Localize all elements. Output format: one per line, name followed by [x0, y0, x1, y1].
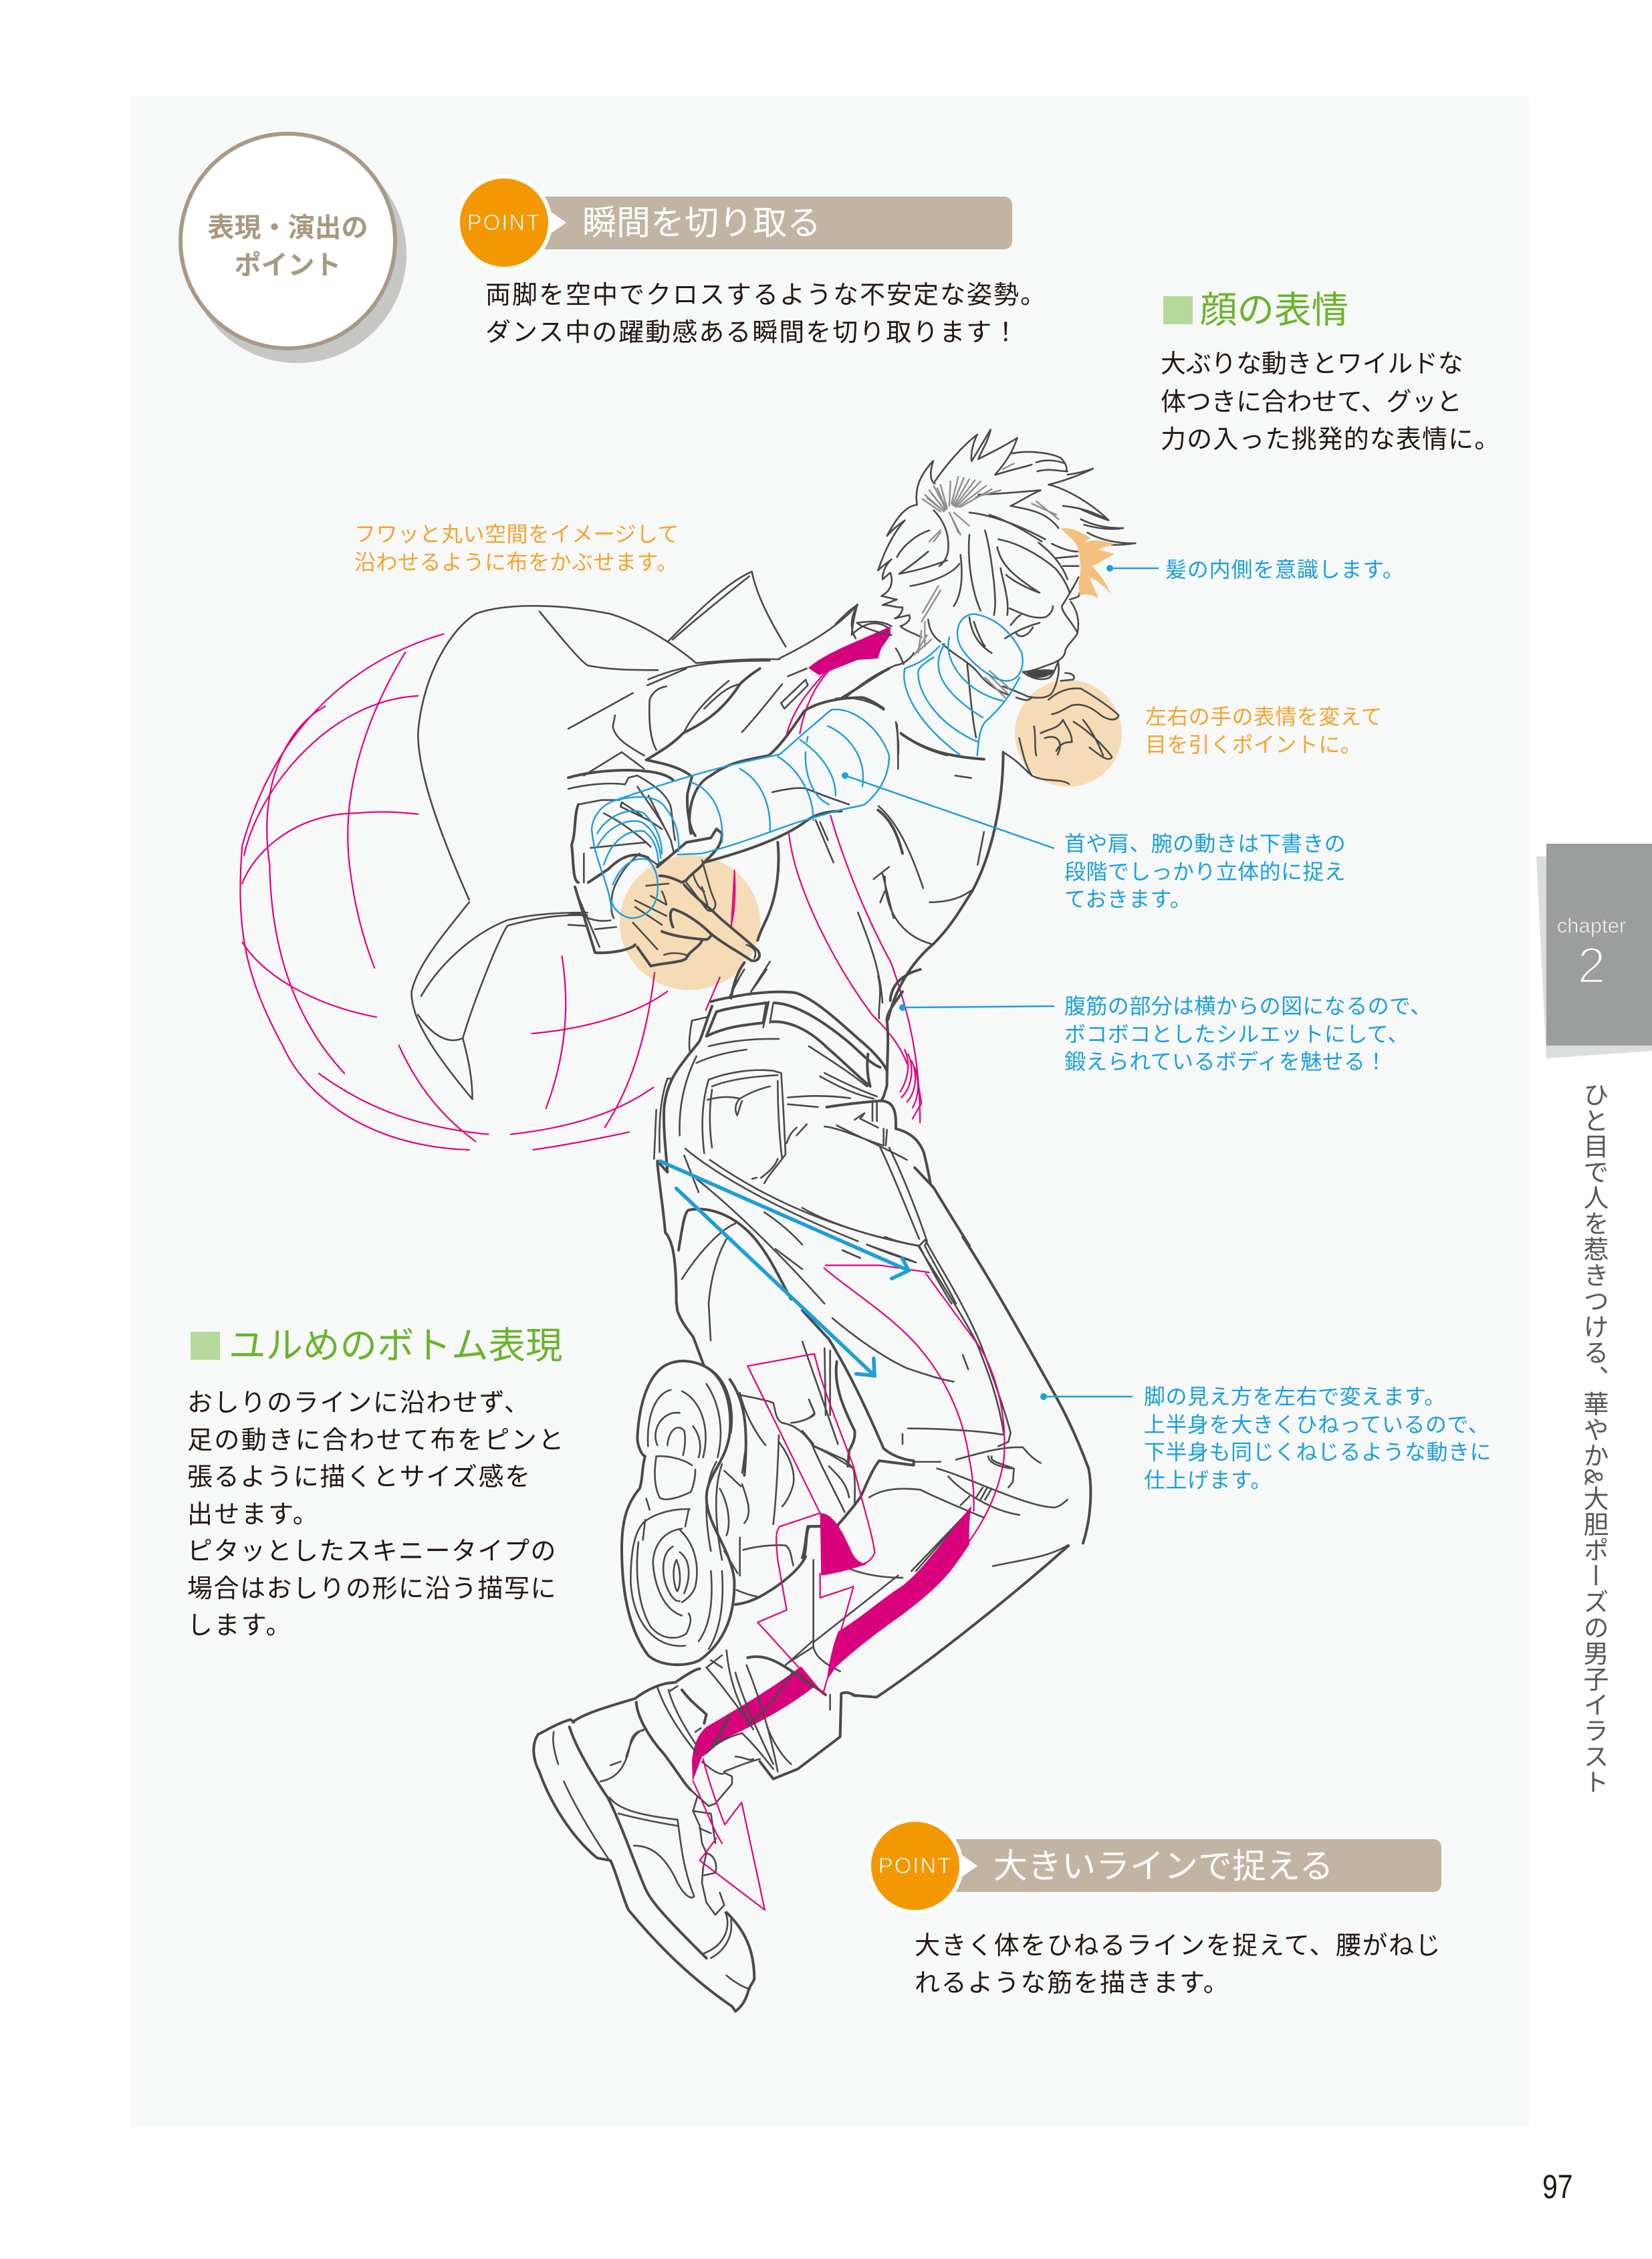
blue construction lines: neck and head [904, 614, 1023, 755]
page number: 97 [1542, 2168, 1573, 2206]
text: point body 1: 両脚を空中でクロスするような不安定な姿勢。 [485, 281, 1047, 310]
panel: background [131, 96, 1530, 2127]
blue arrows: hip direction [660, 1161, 909, 1376]
annotation: hands: 左右の手の表情を変えて [1145, 705, 1383, 729]
dark lines: knee and thigh [802, 1237, 1090, 1571]
text: 顔の表情 body: 力の入った挑発的な表情に。 [1161, 426, 1500, 454]
text: bottom expression body: します。 [187, 1612, 293, 1640]
dark lines: coat [412, 572, 888, 1099]
magenta stripe along the leg: lower [692, 1667, 824, 1782]
annotation: neck and arm: ておきます。 [1064, 887, 1191, 911]
text: bottom expression body [187, 1389, 566, 1640]
annotation: cloth: 沿わせるように布をかぶせます。 [354, 550, 678, 574]
annotation: cloth: フワッと丸い空間をイメージして [354, 522, 679, 546]
annotation: neck and arm [1064, 832, 1346, 911]
colored area: inner hair [1061, 528, 1115, 598]
chapter tab: 2 [1577, 937, 1606, 994]
point heading: 瞬間を切り取る: POINT [467, 210, 541, 235]
sneaker sole [622, 1361, 903, 1671]
pink hatching at waist [901, 1050, 921, 1118]
text: point body 2: 大きく体をひねるラインを捉えて、腰がねじ [915, 1932, 1441, 1960]
point heading: 大きいラインで捉える [871, 1822, 1441, 1910]
magenta blob at knee fold [820, 1513, 867, 1576]
text: 顔の表情 body: 大ぶりな動きとワイルドな [1161, 350, 1463, 378]
pink construction arcs around coat [240, 634, 920, 1150]
leader line: neck and arm [842, 772, 1054, 848]
text: bottom expression body: 足の動きに合わせて布をピンと [187, 1427, 566, 1455]
annotation: abs [1064, 994, 1432, 1074]
annotation: abs: 鍛えられているボディを魅せる！ [1064, 1050, 1387, 1074]
badge: 表現・演出のポイント: 表現・演出の [207, 213, 368, 243]
text: 顔の表情 body [1161, 350, 1500, 454]
annotation: hands: 目を引くポイントに。 [1145, 733, 1362, 757]
point heading: 大きいラインで捉える: POINT [878, 1853, 952, 1878]
badge: 表現・演出のポイント: ポイント [234, 251, 341, 280]
heading: ユルめのボトム表現: ユルめのボトム表現 [229, 1325, 563, 1366]
point heading: 大きいラインで捉える: 大きいラインで捉える [993, 1847, 1333, 1885]
badge: 表現・演出のポイント [179, 132, 406, 363]
pink scribble on shoulder [808, 626, 891, 675]
blue construction lines: arm and wrist [592, 709, 889, 918]
annotation: leg: 上半身を大きくひねっているので、 [1144, 1412, 1490, 1436]
dark line: calf underside [853, 1546, 1068, 1697]
text: point body 1 [485, 281, 1047, 347]
chapter tab: chapter [1557, 914, 1626, 937]
pink lightning: foot [693, 1759, 765, 1910]
text: 顔の表情 body: 体つきに合わせて、グッと [1161, 388, 1462, 416]
dark lines: belt, waist and back pocket [654, 969, 969, 1304]
annotation: neck and arm: 段階でしっかり立体的に捉え [1064, 860, 1346, 884]
leader line: hair [1106, 565, 1159, 572]
leader line: leg [1040, 1393, 1133, 1400]
dark lines: head and hair [836, 430, 1135, 755]
annotation: leg [1144, 1385, 1492, 1492]
pink twist lines: thigh [824, 1266, 1005, 1544]
dark lines: sleeve, cuff and pointing hand [568, 669, 903, 1003]
annotation: leg: 下半身も同じくねじるような動きに [1144, 1440, 1492, 1464]
text: bottom expression body: 張るように描くとサイズ感を [187, 1463, 532, 1492]
annotation: hair: 髪の内側を意識します。 [1165, 558, 1405, 582]
text: point body 1: ダンス中の躍動感ある瞬間を切り取ります！ [485, 319, 1020, 347]
point heading: 瞬間を切り取る [460, 179, 1012, 267]
side title: vertical text: ひと目で人を惹きつける、華やか&大胆ポーズの男子イラスト [1579, 1082, 1607, 1795]
chapter tab [1536, 844, 1652, 1058]
shoe and trouser hem [534, 1641, 856, 2012]
text: bottom expression body: おしりのラインに沿わせず、 [187, 1389, 530, 1417]
point heading: 瞬間を切り取る: 瞬間を切り取る [582, 204, 821, 242]
pink lightning shape: calf [747, 1354, 874, 1694]
annotation: cloth [354, 522, 679, 574]
text: bottom expression body: 場合はおしりの形に沿う描写に [187, 1575, 557, 1603]
leader line: abs [899, 1004, 1054, 1011]
annotation: hands [1145, 705, 1383, 757]
text: point body 2 [915, 1932, 1441, 1998]
pink marks near the pointing hand [732, 870, 735, 921]
magenta stripe along the leg: upper [827, 1506, 971, 1680]
annotation: leg: 仕上げます。 [1144, 1468, 1272, 1492]
text: bottom expression body: 出せます。 [187, 1500, 320, 1528]
dark lines: torso [878, 733, 1032, 1020]
text: bottom expression body: ピタッとしたスキニータイプの [187, 1538, 557, 1566]
heading: 顔の表情: 顔の表情 [1200, 289, 1348, 331]
highlight: left hand circle [620, 855, 760, 990]
annotation: neck and arm: 首や肩、腕の動きは下書きの [1064, 832, 1346, 856]
annotation: abs: ボコボコとしたシルエットにして、 [1064, 1022, 1409, 1046]
annotation: abs: 腹筋の部分は横からの図になるので、 [1064, 994, 1432, 1018]
dark lines: right hand [1019, 721, 1112, 784]
annotation: leg: 脚の見え方を左右で変えます。 [1144, 1385, 1446, 1409]
highlight: right hand circle [1015, 680, 1122, 787]
hair shading strokes [914, 463, 1058, 697]
dark line: hip link to sole [677, 1304, 711, 1366]
text: point body 2: れるような筋を描きます。 [915, 1970, 1229, 1998]
